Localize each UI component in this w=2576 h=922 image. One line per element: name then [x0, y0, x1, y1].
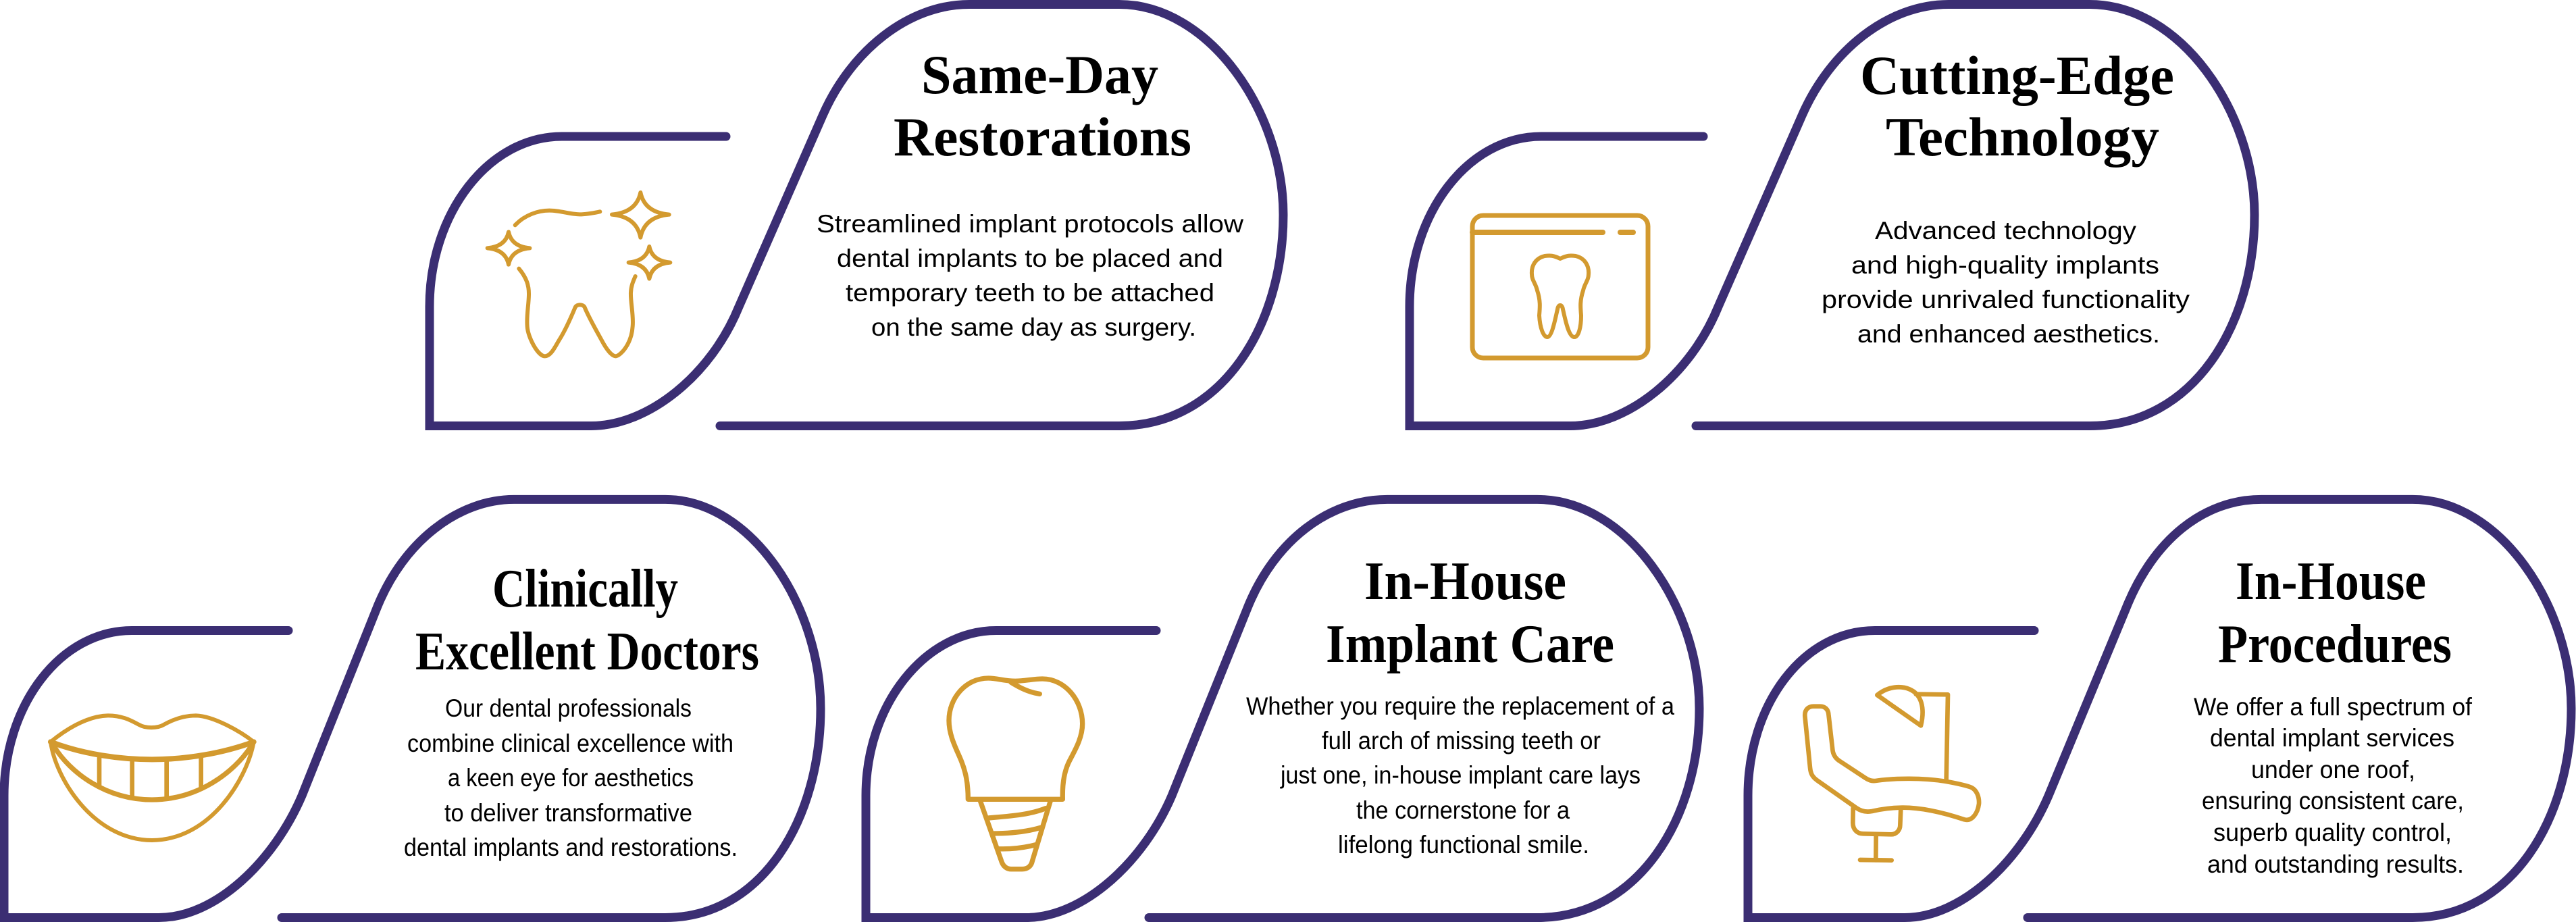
- body text: [404, 694, 738, 861]
- heading: In-House: [2236, 552, 2426, 611]
- heading: [415, 559, 759, 682]
- body text: Streamlined implant protocols allow: [817, 210, 1243, 238]
- body text: dental implants to be placed and: [837, 245, 1223, 272]
- heading: Restorations: [894, 106, 1191, 168]
- panel: clinically excellent doctors: [4, 499, 821, 917]
- body text: [817, 210, 1243, 341]
- body text: [2194, 693, 2473, 878]
- icon: dental chair: [1805, 687, 1979, 861]
- body text: Whether you require the replacement of a: [1246, 692, 1674, 720]
- body text: dental implants and restorations.: [404, 834, 738, 861]
- body text: lifelong functional smile.: [1338, 831, 1589, 859]
- panel: in-house implant care: [866, 499, 1699, 917]
- panel: in-house procedures: [1748, 499, 2571, 917]
- card outline: [430, 4, 1283, 426]
- body text: ensuring consistent care,: [2202, 787, 2464, 815]
- heading: Cutting-Edge: [1860, 45, 2174, 106]
- body text: temporary teeth to be attached: [846, 279, 1214, 307]
- icon: smile: [51, 715, 254, 840]
- heading: [894, 44, 1191, 168]
- body text: full arch of missing teeth or: [1322, 727, 1601, 754]
- card outline: [866, 499, 1699, 917]
- heading: In-House: [1364, 552, 1566, 611]
- body text: combine clinical excellence with: [407, 729, 733, 757]
- body text: and high-quality implants: [1851, 251, 2159, 279]
- heading: Implant Care: [1326, 615, 1614, 674]
- body text: just one, in-house implant care lays: [1280, 761, 1641, 789]
- card outline: [1748, 499, 2571, 917]
- panel: cutting-edge technology: [1410, 4, 2255, 426]
- heading: [2218, 552, 2452, 674]
- body text: Our dental professionals: [445, 694, 692, 722]
- card outline: [4, 499, 821, 917]
- heading: Same-Day: [921, 44, 1158, 105]
- body text: [1822, 217, 2190, 348]
- body text: superb quality control,: [2213, 819, 2452, 846]
- body text: We offer a full spectrum of: [2194, 693, 2473, 721]
- card outline: [1410, 4, 2255, 426]
- body text: and outstanding results.: [2207, 850, 2464, 878]
- panel: same-day restorations: [430, 4, 1283, 426]
- body text: provide unrivaled functionality: [1822, 286, 2190, 313]
- body text: Advanced technology: [1875, 217, 2137, 245]
- icon: dental implant: [949, 678, 1083, 869]
- heading: [1860, 45, 2174, 168]
- body text: and enhanced aesthetics.: [1857, 320, 2160, 348]
- body text: to deliver transformative: [444, 799, 692, 827]
- icon: sparkling tooth: [488, 193, 670, 356]
- body text: a keen eye for aesthetics: [448, 764, 694, 792]
- heading: Excellent Doctors: [415, 622, 759, 682]
- icon: tooth on screen: [1472, 215, 1648, 358]
- heading: Procedures: [2218, 615, 2452, 674]
- body text: [1246, 692, 1674, 859]
- heading: Technology: [1886, 106, 2159, 168]
- body text: on the same day as surgery.: [871, 313, 1196, 341]
- body text: under one roof,: [2251, 756, 2415, 784]
- heading: Clinically: [492, 559, 678, 619]
- body text: the cornerstone for a: [1356, 796, 1570, 824]
- heading: [1326, 552, 1614, 674]
- body text: dental implant services: [2210, 724, 2454, 752]
